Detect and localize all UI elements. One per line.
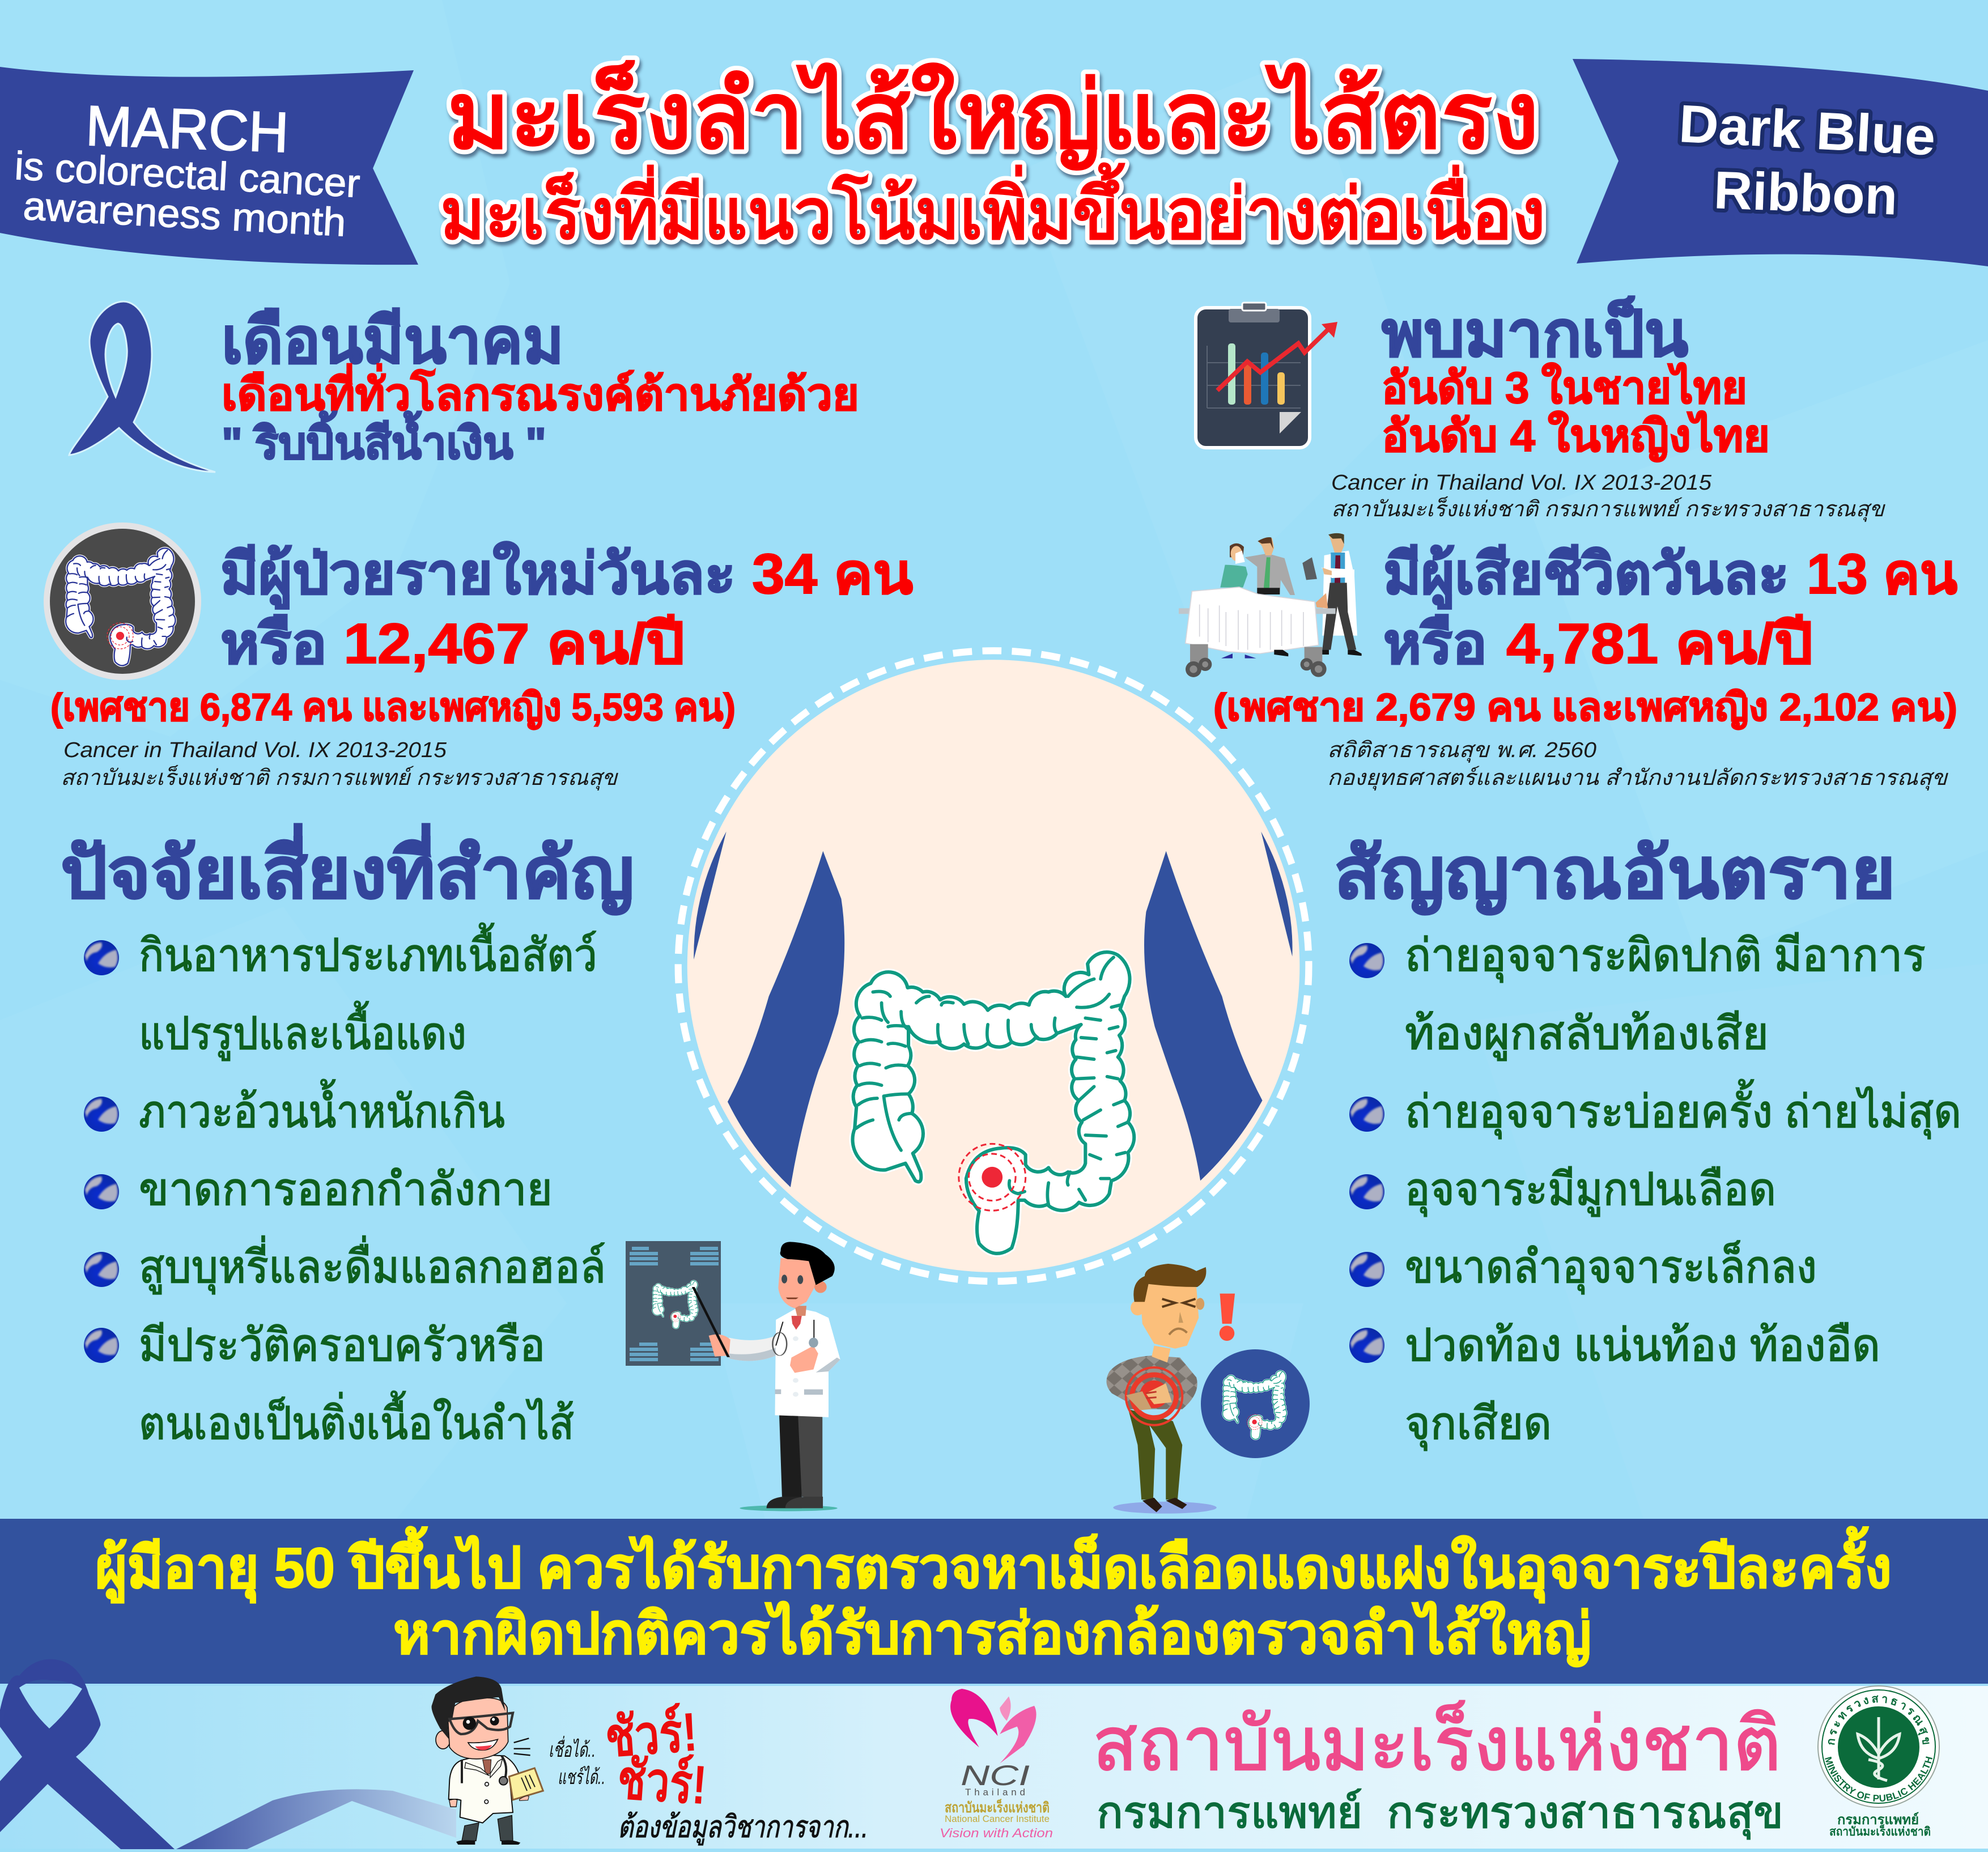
icon: ribbon tail: [176, 1789, 456, 1849]
text block: sure! speech: [549, 1702, 868, 1846]
colon: [853, 952, 1134, 1254]
risk factor: obesity: ภาวะอ้วนน้ำหนักเกิน: [139, 1079, 505, 1137]
text block: March, month of the blue ribbon: [222, 305, 859, 468]
panel: warning signs: [1334, 834, 1961, 1451]
bullet icon: [1349, 1097, 1384, 1132]
NCI letters: NCI: [961, 1760, 1030, 1791]
new cases per day: [220, 541, 913, 609]
risk factor: meat continued: แปรรูปและเนื้อแดง: [139, 1001, 466, 1061]
bullet icon: [84, 940, 119, 975]
deaths per day: [1383, 542, 1957, 609]
heading: เดือนมีนาคม: เดือนมีนาคม: [222, 305, 564, 376]
icon: colon in blue circle: [1201, 1349, 1310, 1458]
text: Dark Blue: Dark Blue: [1677, 94, 1937, 167]
citation line 1: Cancer in Thailand Vol. IX 2013-2015: [63, 738, 447, 762]
exclamation mark: [1220, 1294, 1235, 1341]
logo wings: [950, 1689, 1037, 1764]
citation line 2: สถาบันมะเร็งแห่งชาติ กรมการแพทย์ กระทรวงสาธารณสุข: [1331, 496, 1885, 522]
text block: new cases: [50, 541, 913, 791]
seal caption line 1: กรมการแพทย์: [1837, 1812, 1919, 1828]
small text: believe: เชื่อได้..: [549, 1735, 596, 1761]
risk factor: smoking, alcohol: สูบบุหรี่และดื่มแอลกอฮอล์: [139, 1236, 606, 1294]
heading: warning signs: สัญญาณอันตราย: [1334, 834, 1896, 915]
text: awareness month: awareness month: [22, 184, 347, 245]
text: MARCH: MARCH: [85, 94, 290, 164]
right banner: Dark Blue Ribbon: [1573, 59, 1988, 266]
icon: footer blue ribbon: [0, 1659, 175, 1849]
citation line 2: สถาบันมะเร็งแห่งชาติ กรมการแพทย์ กระทรวงสาธารณสุข: [61, 764, 618, 791]
icon: medical team at patient bed: [1179, 533, 1362, 677]
illustration: man with abdominal pain: [1106, 1264, 1235, 1514]
risk factor: polyps: ตนเองเป็นติ่งเนื้อในลำไส้: [139, 1391, 574, 1449]
deaths per day: มีผู้เสียชีวิตวันละ: [1383, 542, 1789, 609]
banner: screening recommendation: [0, 1519, 1988, 1684]
rank in women: อันดับ 4 ในหญิงไทย: [1382, 410, 1770, 462]
risk factor: meat: กินอาหารประเภทเนื้อสัตว์: [139, 923, 597, 980]
new cases per year: หรือ: [220, 612, 327, 676]
new cases per day: 34 คน: [752, 542, 913, 606]
slogan: Vision with Action: [940, 1826, 1053, 1840]
rank in men: อันดับ 3 ในชายไทย: [1382, 362, 1747, 413]
institute name: [1093, 1700, 1783, 1840]
text: Ribbon: Ribbon: [1713, 160, 1898, 226]
subheading blue: " ริบบิ้นสีน้ำเงิน ": [222, 411, 546, 468]
doctor figure: [692, 1242, 840, 1511]
gender breakdown: (เพศชาย 6,874 คน และเพศหญิง 5,593 คน): [50, 686, 736, 730]
title line 1: มะเร็งลำไส้ใหญ่และไส้ตรง: [447, 60, 1539, 171]
seal bottom text: MINISTRY OF PUBLIC HEALTH: [1825, 1756, 1932, 1802]
citation line 2: กองยุทธศาสตร์และแผนงาน สำนักงานปลัดกระทรวงสาธารณสุข: [1327, 766, 1948, 791]
citation line 1: Cancer in Thailand Vol. IX 2013-2015: [1331, 471, 1712, 495]
small text: share: แชร์ได้..: [558, 1765, 605, 1789]
recommendation line 2: หากผิดปกติควรได้รับการส่องกล้องตรวจลำไส้ใหญ่: [393, 1601, 1591, 1667]
footer panel: [0, 1684, 1988, 1849]
new cases per day: มีผู้ป่วยรายใหม่วันละ: [220, 541, 736, 609]
panel: risk factors: [61, 823, 634, 1449]
gender breakdown: (เพศชาย 2,679 คน และเพศหญิง 2,102 คน): [1213, 686, 1957, 730]
bullet icon: [84, 1328, 119, 1363]
central illustration: torso with colon: [678, 651, 1309, 1281]
Thailand: Thailand: [965, 1787, 1025, 1798]
seal top text: กระทรวงสาธารณสุข: [1828, 1696, 1929, 1745]
icon: clipboard chart: [1196, 303, 1337, 448]
text block: deaths: [1213, 542, 1957, 791]
subheading red: เดือนที่ทั่วโลกรณรงค์ต้านภัยด้วย: [222, 363, 859, 419]
bullet icon: [84, 1252, 119, 1287]
seal caption line 2: สถาบันมะเร็งแห่งชาติ: [1829, 1824, 1931, 1838]
risk factor: exercise: ขาดการออกกำลังกาย: [139, 1164, 553, 1214]
deaths per year: [1383, 612, 1813, 676]
logo: National Cancer Institute: [940, 1689, 1053, 1840]
x-ray panel: [626, 1241, 721, 1366]
NCI English name: National Cancer Institute: [945, 1813, 1050, 1824]
icon: blue ribbon: [69, 301, 215, 472]
sure! 1: ชัวร์!: [604, 1702, 699, 1769]
bullet icon: [1349, 1328, 1384, 1363]
sign: abnormal bowel habit: ถ่ายอุจจาระผิดปกติ มีอาการ: [1405, 930, 1926, 983]
bullet icon: [1349, 1174, 1384, 1209]
deaths per day: 13 คน: [1807, 542, 1957, 606]
sign: abdominal pain: ปวดท้อง แน่นท้อง ท้องอืด: [1405, 1320, 1880, 1370]
left banner: March awareness month: [0, 67, 418, 265]
heading: พบมากเป็น: พบมากเป็น: [1382, 296, 1688, 369]
icon: colon in dark circle: [44, 523, 201, 680]
illustration: cartoon doctor: [432, 1676, 543, 1845]
new cases per year: 12,467 คน/ปี: [343, 612, 685, 676]
deaths per year: 4,781 คน/ปี: [1506, 612, 1813, 676]
title: [440, 60, 1545, 254]
sign: narrow stool: ขนาดลำอุจจาระเล็กลง: [1405, 1240, 1817, 1294]
text block: most common cancer ranking: [1331, 296, 1885, 522]
bullet icon: [84, 1097, 119, 1132]
citation line 1: สถิติสาธารณสุข พ.ศ. 2560: [1327, 738, 1596, 763]
Department and ministry: กรมการแพทย์ กระทรวงสาธารณสุข: [1097, 1787, 1783, 1840]
risk factor: family history: มีประวัติครอบครัวหรือ: [139, 1320, 545, 1370]
sign: bloating: จุกเสียด: [1405, 1398, 1552, 1451]
bullet icon: [84, 1174, 119, 1209]
sign: mucus and blood: อุจจาระมีมูกปนเลือด: [1405, 1164, 1776, 1217]
bullet icon: [1349, 943, 1384, 978]
sign: frequent stools: ถ่ายอุจจาระบ่อยครั้ง ถ่ายไม่สุด: [1405, 1079, 1961, 1139]
sure! 2: ชัวร์!: [615, 1749, 708, 1816]
bullet icon: [1349, 1252, 1384, 1287]
illustration: doctor pointing at x-ray: [626, 1241, 840, 1511]
sign: constipation alternating diarrhea: ท้องผูกสลับท้องเสีย: [1405, 1008, 1769, 1061]
text: is colorectal cancer: is colorectal cancer: [14, 143, 361, 206]
deaths per year: หรือ: [1383, 612, 1487, 676]
National Cancer Institute Thai: สถาบันมะเร็งแห่งชาติ: [1093, 1700, 1781, 1786]
new cases per year: [220, 612, 685, 676]
small text: academic info from: ต้องข้อมูลวิชาการจาก...: [618, 1810, 868, 1846]
recommendation line 1: ผู้มีอายุ 50 ปีขึ้นไป ควรได้รับการตรวจหาเม็ดเลือดแดงแฝงในอุจจาระปีละครั้ง: [95, 1526, 1892, 1603]
NCI Thai name: สถาบันมะเร็งแห่งชาติ: [945, 1799, 1050, 1816]
heading: risk factors: ปัจจัยเสี่ยงที่สำคัญ: [61, 823, 634, 915]
title line 2: มะเร็งที่มีแนวโน้มเพิ่มขึ้นอย่างต่อเนื่อง: [440, 162, 1545, 254]
logo: Ministry of Public Health: [1817, 1685, 1940, 1838]
